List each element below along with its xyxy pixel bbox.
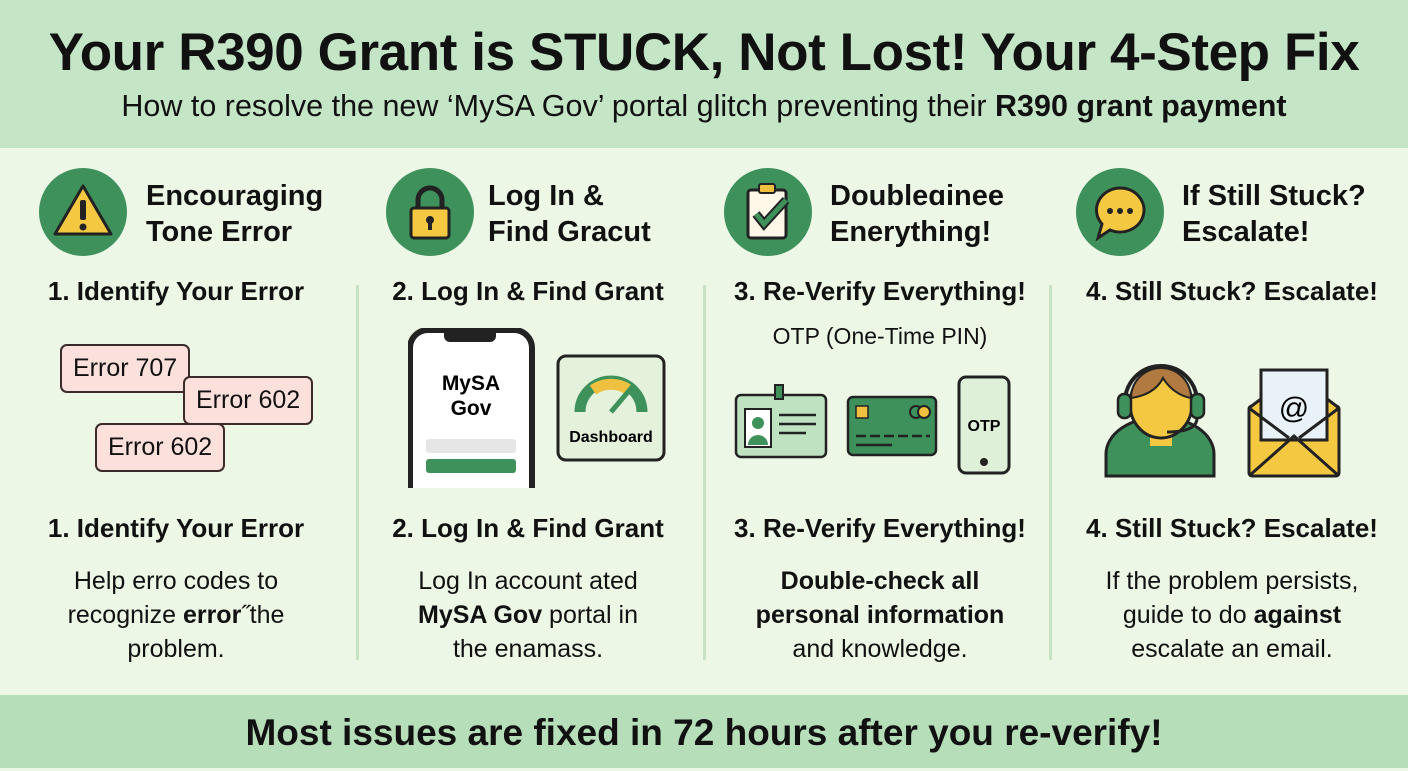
icon: warning: [39, 168, 127, 256]
body text: guide to do against: [1123, 601, 1341, 629]
column title: Doubleɑinee: [830, 180, 1004, 212]
phone and dashboard: Gov: [451, 397, 492, 420]
body text: personal information: [756, 601, 1004, 629]
phone and dashboard: Dashboard: [569, 429, 653, 446]
support agent and email icons: @: [1279, 392, 1309, 425]
error codes: [60, 344, 313, 472]
body text: MySA Gov portal in: [418, 601, 638, 629]
verification icons: [734, 376, 1010, 474]
body text: [756, 567, 1004, 663]
column title: Find Gracut: [488, 216, 651, 248]
panel: step 2: [386, 168, 666, 663]
column title: Enerything!: [830, 216, 991, 248]
header: [0, 0, 1408, 148]
error codes: Error 707: [73, 354, 177, 382]
footer banner: [0, 695, 1408, 768]
step heading: 2. Log In & Find Grant: [392, 276, 664, 306]
step heading 2: 1. Identify Your Error: [48, 513, 304, 543]
column title: Tone Error: [146, 216, 292, 248]
icon: chat bubble: [1076, 168, 1164, 256]
subtitle: How to resolve the new ‘MySA Gov’ portal glitch preventing their R390 grant payment: [121, 89, 1287, 123]
body text: Log In account ated: [418, 567, 638, 595]
footer banner: Most issues are fixed in 72 hours after you re-verify!: [245, 712, 1163, 753]
column title: Encouraging: [146, 180, 323, 212]
error codes: Error 602: [108, 433, 212, 461]
column title: [1182, 180, 1366, 248]
column title: Log In &: [488, 180, 604, 212]
panel: step 4: [1076, 168, 1378, 663]
phone and dashboard: [408, 328, 666, 488]
body text: If the problem persists,: [1106, 567, 1358, 595]
step heading: 3. Re-Verify Everything!: [734, 276, 1026, 306]
step heading 2: 3. Re-Verify Everything!: [734, 513, 1026, 543]
body text: [418, 567, 638, 663]
body text: the enamass.: [453, 635, 603, 663]
OTP label: OTP (One-Time PIN): [773, 323, 987, 349]
title: Your R390 Grant is STUCK, Not Lost! Your 4-Step Fix: [49, 23, 1359, 82]
body text: problem.: [127, 635, 225, 663]
panel: step 1: [39, 168, 323, 663]
body text: Help erro codes to: [74, 567, 278, 595]
step heading 2: 4. Still Stuck? Escalate!: [1086, 513, 1378, 543]
body text: [68, 567, 284, 663]
column title: If Still Stuck?: [1182, 180, 1366, 212]
panel: step 3: [724, 168, 1026, 663]
step heading: 1. Identify Your Error: [48, 276, 304, 306]
body text: Double-check all: [781, 567, 979, 595]
body text: [1106, 567, 1358, 663]
verification icons: OTP: [968, 418, 1001, 435]
column title: Escalate!: [1182, 216, 1309, 248]
icon: clipboard: [724, 168, 812, 256]
step heading 2: 2. Log In & Find Grant: [392, 513, 664, 543]
body text: escalate an email.: [1131, 635, 1333, 663]
step heading: 4. Still Stuck? Escalate!: [1086, 276, 1378, 306]
column title: [146, 180, 323, 248]
column title: [830, 180, 1004, 248]
icon: padlock: [386, 168, 474, 256]
support agent and email icons: [1104, 364, 1340, 478]
column title: [488, 180, 651, 248]
body text: recognize error˝the: [68, 601, 284, 629]
error codes: Error 602: [196, 386, 300, 414]
phone and dashboard: MySA: [442, 372, 500, 395]
body text: and knowledge.: [792, 635, 968, 663]
